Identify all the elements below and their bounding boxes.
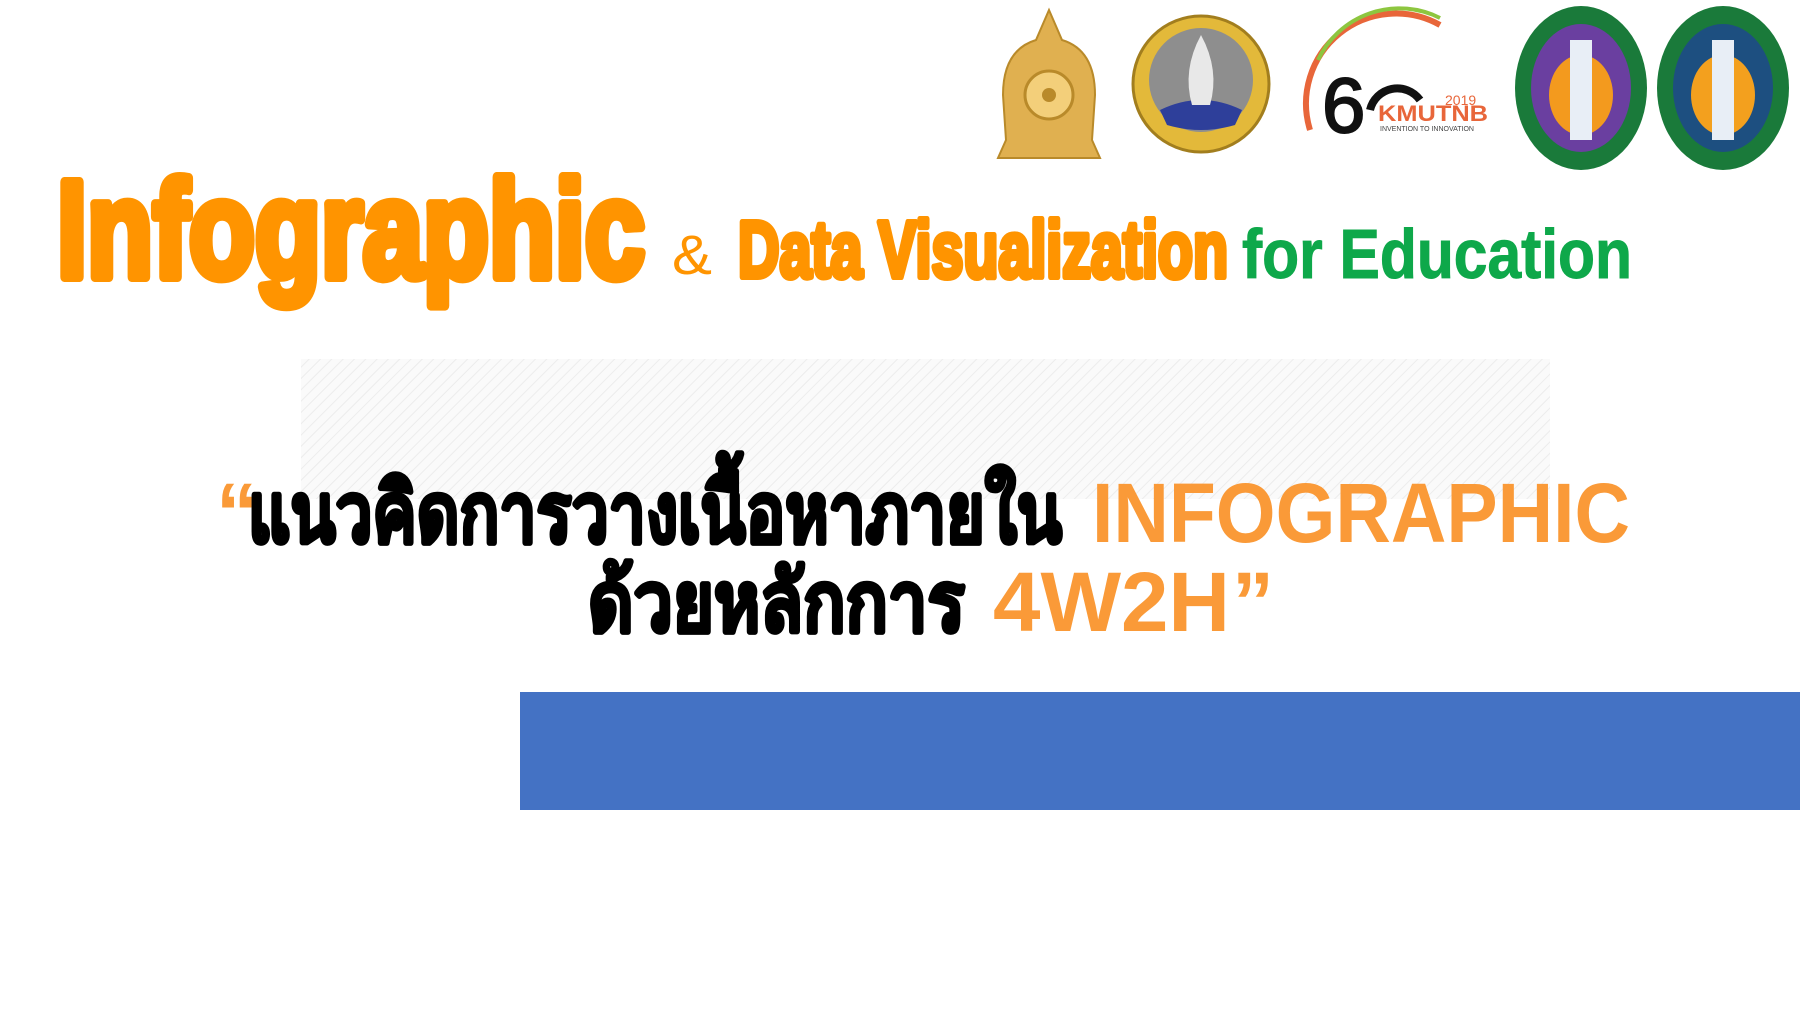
title	[57, 153, 1632, 307]
subtitle	[216, 451, 1630, 649]
subtitle: 4W2H	[993, 555, 1230, 649]
subtitle: ด้วยหลักการ	[588, 555, 965, 649]
subtitle: “	[216, 466, 258, 560]
logo: ministry emblem	[998, 10, 1100, 158]
subtitle: แนวคิดการวางเนื้อหาภายใน	[248, 451, 1062, 560]
logo: teacher institute seal	[1133, 16, 1269, 152]
logo: KMUTNB 60: 6	[1322, 61, 1365, 149]
logo: KMUTNB 60: KMUTNB	[1378, 101, 1488, 126]
title: for Education	[1242, 215, 1632, 293]
logo: Rajanagarindra	[1657, 6, 1789, 170]
logo: KMUTNB 60: 2019	[1445, 92, 1476, 108]
subtitle: INFOGRAPHIC	[1092, 466, 1630, 560]
blue banner	[520, 692, 1800, 810]
title: &	[672, 223, 712, 286]
logo: KMUTNB 60	[1306, 8, 1488, 149]
title: Infographic	[57, 153, 645, 307]
title: Data Visualization	[738, 205, 1228, 294]
hatched panel	[301, 359, 1550, 499]
subtitle: ”	[1232, 555, 1274, 649]
logo: KMUTNB 60: INVENTION TO INNOVATION	[1380, 126, 1474, 133]
logo: Suan Sunandha	[1515, 6, 1647, 170]
